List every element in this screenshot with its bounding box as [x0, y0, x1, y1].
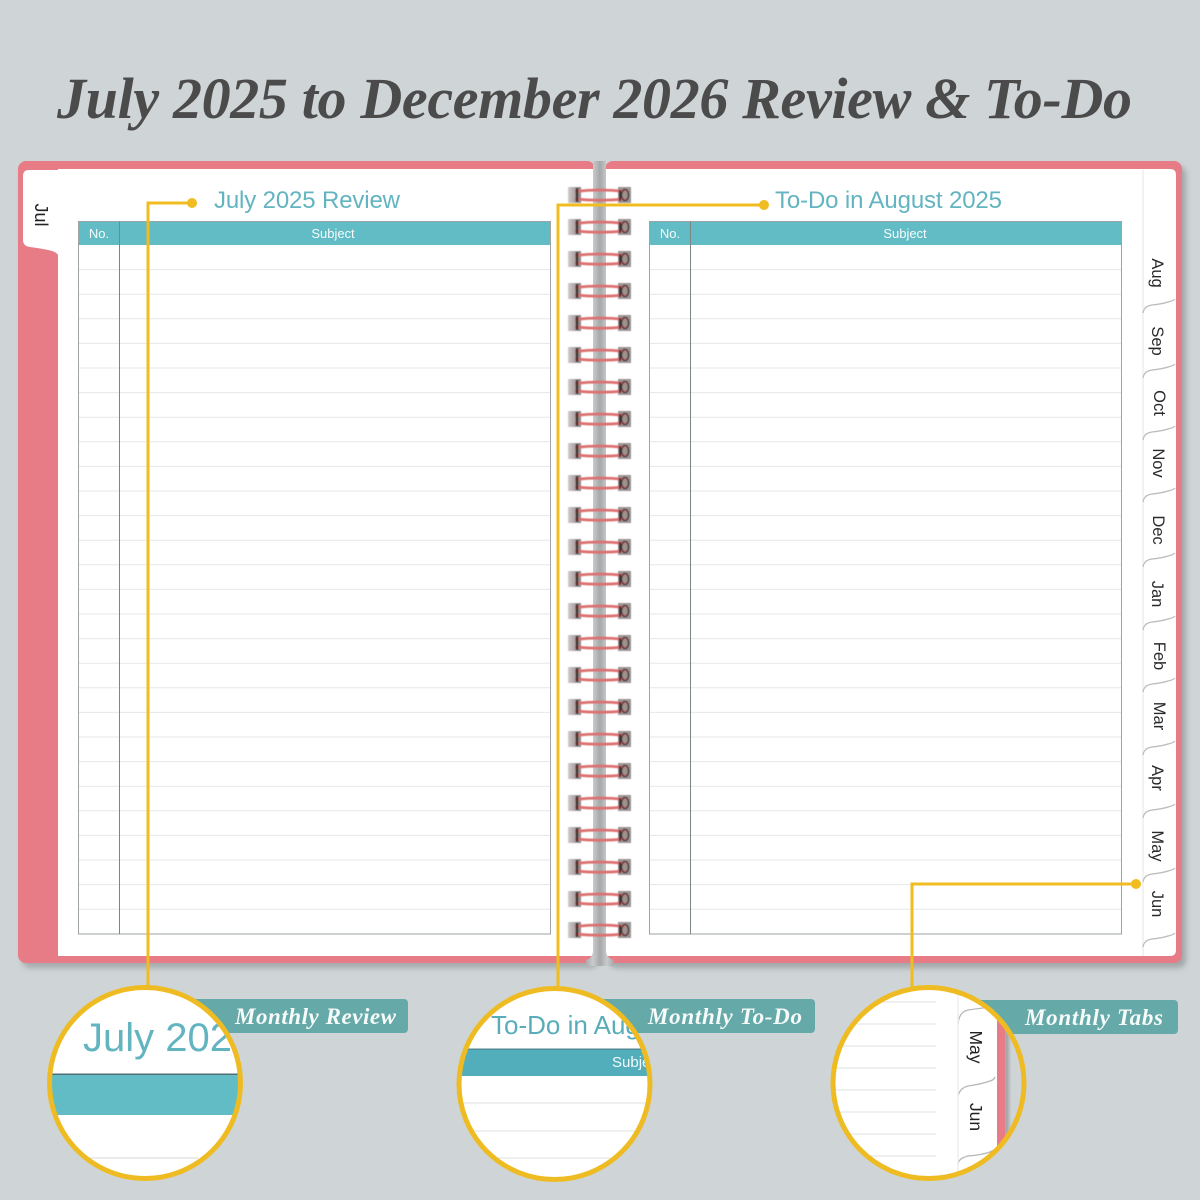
monthly tabs column: Sep	[1148, 326, 1166, 356]
magnifier: August to-do: Subject	[612, 1054, 663, 1071]
callout arrow: Monthly To-Do	[558, 202, 768, 990]
magnifier: August to-do	[450, 988, 663, 1180]
label: Monthly To-Do: Monthly To-Do	[647, 1004, 802, 1029]
heading: July 2025 Review: July 2025 Review	[214, 187, 401, 214]
spiral binding coils	[568, 187, 631, 938]
right pink cover	[605, 161, 1182, 963]
label: Monthly Tabs	[975, 1000, 1178, 1034]
right white page	[605, 169, 1176, 956]
table: August to-do: No.	[660, 226, 680, 241]
magnifier: monthly tabs: May	[966, 1030, 986, 1064]
table: July review: No.	[89, 226, 109, 241]
label: Monthly Tabs: Monthly Tabs	[1024, 1005, 1163, 1030]
magnifier: July review: July 202	[83, 1016, 232, 1060]
panel: left notebook page	[18, 161, 599, 968]
magnifier: monthly tabs: Jun	[966, 1103, 986, 1131]
title: July 2025 to December 2026 Review & To-Do	[56, 66, 1132, 131]
callout arrow: Monthly Review	[148, 200, 196, 988]
tab: Jul: Jul	[31, 203, 51, 227]
label: Monthly Review: Monthly Review	[234, 1004, 397, 1029]
monthly tabs column: Jan	[1148, 581, 1166, 607]
table: July review	[78, 222, 551, 934]
magnifier: August to-do: To-Do in Aug	[491, 1010, 640, 1040]
monthly tabs column: Oct	[1150, 390, 1168, 416]
panel: right notebook page	[605, 161, 1186, 968]
monthly tabs column: Apr	[1148, 765, 1166, 791]
monthly tabs column: Aug	[1148, 258, 1166, 288]
monthly tabs column: Mar	[1150, 702, 1168, 731]
left white page	[58, 169, 595, 956]
monthly tabs column: May	[1148, 830, 1166, 862]
monthly tabs column: Jun	[1148, 891, 1166, 917]
table: July review: Subject	[311, 226, 355, 241]
monthly tabs column: Feb	[1150, 642, 1168, 670]
label: Monthly To-Do	[600, 999, 815, 1033]
table: August to-do: Subject	[883, 226, 927, 241]
left pink cover	[18, 161, 595, 963]
callout arrow: Monthly Tabs	[912, 880, 1140, 988]
heading: To-Do in August 2025: To-Do in August 2025	[775, 187, 1002, 214]
monthly tabs column: Dec	[1149, 515, 1167, 545]
magnifier: July review	[40, 988, 250, 1178]
tab: Jul	[23, 170, 59, 256]
magnifier: monthly tabs	[826, 985, 1028, 1180]
monthly tabs column	[1143, 170, 1175, 956]
spine	[586, 161, 614, 966]
table: August to-do	[649, 222, 1122, 934]
monthly tabs column: Nov	[1149, 448, 1167, 478]
label: Monthly Review	[190, 999, 408, 1033]
